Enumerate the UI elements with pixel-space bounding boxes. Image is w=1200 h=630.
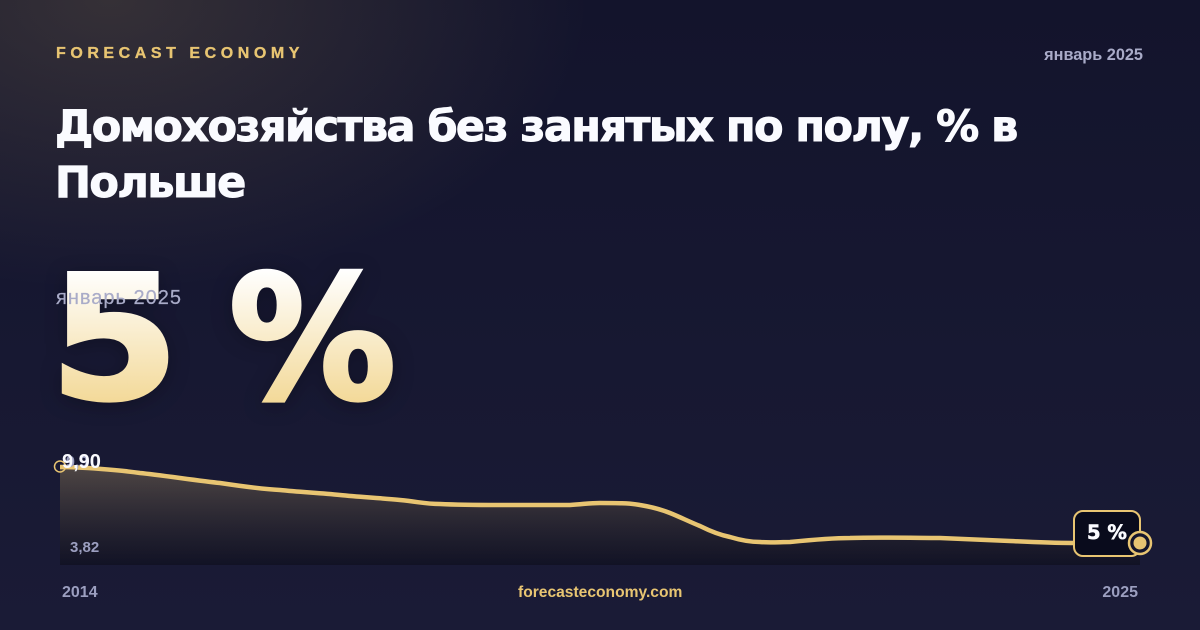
start marker [54,461,66,472]
title [55,102,1017,208]
footer site: forecasteconomy.com [518,584,682,601]
brand label: FORECAST ECONOMY [56,45,304,62]
chart area fill [60,467,1140,565]
big value: 5 [50,239,179,438]
big value [50,239,396,438]
max value: 9,90 [62,451,101,473]
end value badge: 5 % [1087,521,1127,544]
chart line [60,467,1140,543]
overlapping date label: январь 2025 [56,287,182,309]
hidden-behind start label: 9,9 [66,454,88,471]
end marker [1129,532,1151,554]
date top right: январь 2025 [1044,46,1143,64]
title: Польше [55,158,245,208]
end year: 2025 [1102,584,1138,601]
title: Домохозяйства без занятых по полу, % в [55,102,1017,152]
start year: 2014 [62,584,98,601]
min axis value: 3,82 [70,539,99,556]
big value: % [229,239,396,438]
end value badge [1074,511,1140,556]
